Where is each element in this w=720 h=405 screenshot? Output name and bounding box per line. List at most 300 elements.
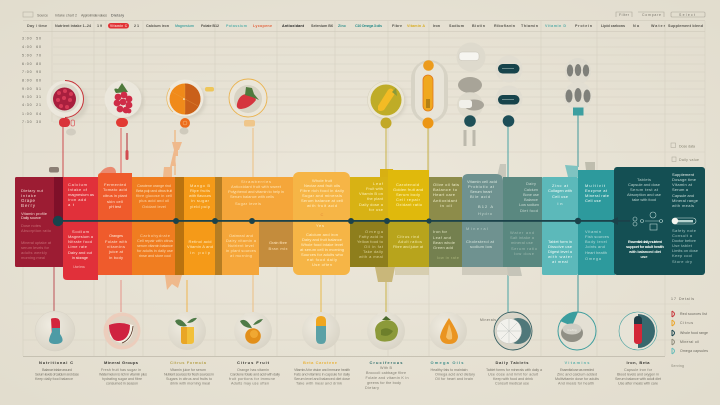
- caption 10: [615, 360, 661, 386]
- band 14 teal: [578, 170, 615, 275]
- caption 6: Folate and vitamin K in: [366, 376, 408, 380]
- caption 1: Balance intake around: [42, 368, 72, 372]
- caption 8: Daily Tablets: [496, 360, 529, 365]
- text: band 4: plus acid and oil: [139, 198, 169, 203]
- text: band 9 lower: Adult ratios: [398, 239, 422, 244]
- legend bottom right: Mineral oil: [680, 340, 699, 344]
- text: band 3: citrus in plant: [103, 193, 128, 198]
- band 9 yellow: [388, 170, 429, 221]
- text: band 6: Sugar levels: [235, 201, 261, 206]
- text: band 8: for use: [369, 207, 384, 212]
- caption 2: hydrating sugar and fibre: [102, 377, 142, 381]
- text: band 10 lower: Green add: [433, 245, 453, 250]
- text: band 2: in storage: [72, 255, 89, 260]
- text: band 5: with flavours: [189, 193, 211, 198]
- text: band 4: for adults in daily use: [137, 248, 174, 253]
- icon: yellow fruit: [368, 82, 406, 128]
- icon: tablet in teal ring: [558, 312, 596, 350]
- header row labels: Nutrient intake 1–24: [55, 24, 92, 28]
- caption 7: [430, 360, 475, 381]
- text: dark panel right: Limits on dose: [672, 248, 699, 253]
- text: band 12: [510, 181, 540, 256]
- text: dark panel right: Keep cool: [672, 253, 692, 258]
- text: band 14: Enzyme at: [585, 188, 608, 193]
- row labels: [22, 36, 41, 124]
- text: band 5: Ripe fruits: [190, 188, 210, 193]
- text: band 6: at morning: [230, 253, 252, 258]
- text: band 1: Mineral uptake at: [21, 240, 52, 245]
- text: dark panel right: Consult a: [672, 233, 693, 238]
- text: band 14: Joints and: [585, 244, 605, 249]
- icon: pomegranate: [46, 80, 88, 136]
- text: band 4: fibre glucose in cell: [136, 193, 172, 198]
- text: band 6: Bran mix: [268, 246, 288, 251]
- text: band 9 lower: Citrus rind: [397, 234, 419, 239]
- icon: amber and teal capsule: [302, 312, 340, 350]
- header row labels: Vitamin A: [407, 24, 425, 28]
- caption 2: Fresh fruit has sugar in: [101, 368, 141, 372]
- text: band 10: Heart care: [433, 192, 456, 197]
- band 6 light amber: [222, 177, 293, 275]
- caption 7: Healthy fats to maintain: [430, 368, 468, 372]
- icon: white tablet disc: Minerals: [480, 318, 496, 322]
- text: band 7: with fruit acid: [307, 203, 337, 208]
- caption 7: Omega acid and dietary: [435, 372, 475, 376]
- row labels: 9:00 51: [22, 87, 41, 91]
- text: band 11: Probiotic at: [468, 184, 495, 189]
- panel: colour bands: [15, 167, 705, 280]
- header row labels: Na: [633, 24, 640, 28]
- text: band 12: Balance: [524, 197, 539, 202]
- text: dark panel right: Store dry: [672, 259, 692, 264]
- text: band 12: mineral use: [511, 240, 534, 245]
- text: band 13: at meal: [552, 259, 568, 264]
- text: band 1: adults weekly: [21, 250, 47, 255]
- header row labels: Riboflavin: [494, 24, 516, 28]
- caption 9: Essential use as needed: [560, 368, 594, 372]
- text: band 13: Cell use: [552, 194, 569, 199]
- icon: orange with leaves: [234, 312, 272, 350]
- text: band 6: Nutrient level: [228, 243, 254, 248]
- header row labels: Lipid carbons: [601, 24, 625, 28]
- text: band 13: with water: [548, 254, 573, 259]
- text: dark panel right: Capsule and: [672, 193, 694, 198]
- caption 6: greens for the body: [367, 381, 401, 385]
- text: band 2: Sodium: [72, 229, 90, 234]
- text: band 4: Carbohydrate: [140, 233, 171, 238]
- band 6 dark strip: [215, 177, 222, 275]
- header row labels: Protein: [575, 24, 593, 28]
- text: band 7: Nectar and fruit oils: [304, 183, 340, 188]
- text: band 11: Hydro: [478, 211, 493, 216]
- legend top right: Dose data: [679, 144, 695, 148]
- text: band 2: magnesium as: [68, 192, 94, 197]
- text: band 7: Fibre rich food in daily: [300, 188, 344, 193]
- band 5 dark strip: [175, 177, 184, 275]
- text: band 12: Serum ratio: [511, 246, 538, 251]
- caption 9: [555, 360, 599, 386]
- text: band 11: sodium low: [470, 244, 492, 249]
- text: band 10: Antioxidant: [433, 198, 458, 203]
- text: band 8: the plant: [367, 196, 384, 201]
- text: band 1: Dietary nut: [21, 188, 44, 193]
- text: band 3: skin cell: [107, 199, 123, 204]
- text: band 6: Oatmeal and: [229, 233, 253, 238]
- band 11 grey teal: [462, 174, 503, 267]
- text: band 11: [466, 179, 497, 249]
- caption 3: Citrus Formula: [170, 360, 207, 365]
- text: band 14: Mineral rate: [585, 193, 610, 198]
- legend bottom right: 17: [671, 297, 676, 301]
- header row labels: Lycopene: [253, 24, 272, 28]
- caption 9: And meals for health: [558, 382, 594, 386]
- header row labels: Iron: [433, 24, 441, 28]
- text: band 13: Zinc at: [552, 183, 569, 188]
- row labels: 7:00 90: [22, 70, 41, 74]
- caption 2: Mineral Groups: [104, 360, 139, 365]
- caption 4: Orange has vitamin: [237, 368, 269, 372]
- text: band 4: serum vitamin balance: [137, 243, 174, 248]
- text: band 6: Grain fibre: [269, 240, 288, 245]
- header row labels: Sodium: [449, 24, 465, 28]
- header row labels: Thiamin: [521, 24, 539, 28]
- text: dark panel right: Serum a: [672, 187, 689, 192]
- text: band 13: Collagen with: [548, 188, 572, 193]
- text: band 6: [226, 179, 288, 258]
- text: band 3: pH test: [109, 204, 122, 209]
- text: band 11: Mineral: [466, 226, 488, 231]
- text: band 7: at serum cell in morning: [300, 247, 344, 252]
- band 6 lower brown: [259, 221, 293, 267]
- text: band 8 lower: Yellow food to: [357, 239, 384, 244]
- text: dark panel left: support for adult health: [626, 244, 665, 249]
- row labels: 7:30 30: [22, 120, 41, 124]
- text: band 2: iron add: [68, 197, 86, 202]
- caption 1: [35, 360, 79, 381]
- text: band 13: Dissolve use: [548, 244, 573, 249]
- text: band 7: Whole food intake level: [301, 242, 343, 247]
- text: dark panel right: Doctor before: [672, 238, 697, 243]
- timeline: [53, 216, 630, 226]
- legend bottom right: Omega capsules: [680, 349, 708, 353]
- text: dark panel left: Tablets: [637, 177, 651, 182]
- legend top right: [671, 143, 699, 162]
- caption 5: Vitamin A for vision and immune health: [294, 368, 350, 372]
- text: band 11: Cholesterol at: [466, 239, 495, 244]
- caption 4: Citrus Fruit: [237, 360, 270, 365]
- text: band 8 lower: Fatty acid in: [359, 234, 383, 239]
- text: band 2: [68, 182, 94, 269]
- band 10 lower: [429, 221, 462, 267]
- icon: grey beans: [564, 58, 592, 116]
- icon: oil drop: [429, 312, 467, 350]
- text: band 12: Water and: [510, 230, 534, 235]
- text: band 14: Vitamin: [585, 229, 601, 234]
- icon: raspberry: [104, 80, 144, 160]
- text: band 3: Fermented: [104, 182, 126, 187]
- text: band 10 lower: low in rate: [437, 255, 460, 260]
- text: dark panel left: Absorption and use: [627, 192, 662, 197]
- text: band 11: Bile acid: [470, 194, 490, 199]
- dark panel: [614, 167, 705, 275]
- text: band 4: Beta pulp and citrus fruit: [136, 188, 173, 193]
- caption 8: Consult medical use: [495, 382, 529, 386]
- text: dark panel right: Vitamin at: [672, 182, 693, 187]
- text: band 14: Heart health: [585, 250, 607, 255]
- caption 4: [229, 360, 280, 386]
- text: band 6: in plant sources: [226, 248, 256, 253]
- caption 5: Take with meal and drink: [296, 382, 342, 386]
- icon: white tablet disc: [480, 312, 532, 350]
- text: band 12: low dose: [514, 251, 535, 256]
- caption 10: Blood levels and oxygen in: [617, 372, 659, 376]
- header row labels: 19: [97, 24, 102, 28]
- caption 9: Vitamins: [564, 360, 590, 365]
- text: band 5: Vitamin A and: [187, 244, 213, 249]
- header row labels: Vitamin D: [545, 24, 566, 28]
- text: band 7: Use often: [312, 262, 332, 267]
- text: band 2: Nitrate food: [68, 239, 92, 244]
- text: band 11: Serum heart: [470, 189, 493, 194]
- text: band 1: Daily source: [21, 215, 42, 220]
- header row labels: Potassium: [226, 24, 248, 28]
- text: band 3: [103, 182, 128, 260]
- band 9 lower: [388, 221, 429, 267]
- header row labels: Folate B12: [201, 24, 219, 28]
- text: band 10 lower: Leaf and: [433, 235, 451, 240]
- header row labels: Biotin: [472, 24, 486, 28]
- header strip: Approximate values: [81, 14, 107, 18]
- row labels: 4:00 60: [22, 45, 41, 49]
- text: band 6: Dairy vitamin a: [226, 238, 257, 243]
- connector lines: [54, 112, 578, 312]
- text: band 7: Serum balance at cell: [301, 198, 343, 203]
- top-right controls: [616, 12, 705, 17]
- text: band 9: Cell repair: [396, 197, 421, 202]
- caption 1: Nutritional C: [39, 360, 73, 365]
- row labels: 4:30 21: [22, 103, 41, 107]
- caption 5: Beta Carotene: [303, 360, 338, 365]
- text: band 8: [359, 181, 384, 212]
- text: band 3: in body: [109, 255, 123, 260]
- top-right controls: Filter: [619, 13, 630, 17]
- text: band 2: at: [68, 202, 75, 207]
- legend bottom right: Serving: [671, 364, 684, 368]
- text: band 13: in: [558, 201, 562, 206]
- text: band 12: Bone use: [523, 192, 540, 197]
- caption 5: [294, 360, 350, 386]
- text: band 5: Mango B: [190, 183, 210, 188]
- text: band 14: Body level: [585, 239, 607, 244]
- text: band 14: [585, 183, 610, 261]
- text: band 3: Oranges: [109, 233, 123, 238]
- caption 8: [486, 360, 543, 386]
- text: band 8 lower: Oil in fat: [364, 244, 384, 249]
- caption 6: [365, 360, 408, 390]
- icon: molecule diagram: [633, 212, 663, 230]
- caption 8: Tablet forms for minerals with daily a: [486, 368, 543, 372]
- text: band 1: morning meal: [21, 255, 45, 260]
- icon: thermometer capsule: [35, 311, 75, 351]
- text: band 8: Fruit with: [366, 186, 383, 191]
- band 10 olive: [429, 177, 462, 221]
- text: band 4: Cell repair with citrus: [137, 238, 173, 243]
- text: band 13: Digest level a: [548, 249, 573, 254]
- icon: tall capsule: [411, 60, 448, 128]
- top-right controls: Compare: [642, 13, 661, 17]
- icon: dose slider: [672, 218, 696, 224]
- caption 3: Sugars in citrus and fruits to: [166, 377, 212, 381]
- text: band 1: Dose notes: [21, 223, 41, 228]
- text: dark panel right: Use tablet: [672, 243, 693, 248]
- bottom column captions: [35, 360, 661, 390]
- caption 6: Cruciferous: [370, 360, 403, 365]
- text: band 4: [136, 183, 174, 258]
- text: band 7: eat food daily: [307, 257, 337, 262]
- text: band 2: Dairy and cut: [68, 250, 93, 255]
- header row labels: Vitamin C: [110, 24, 128, 28]
- text: band 3: Folate with: [105, 239, 127, 244]
- text: dark panel left: Essential daily nutrient: [628, 239, 663, 244]
- caption 5: Serum level and balanced diet dose: [294, 377, 350, 381]
- text: band 5: in pulp: [190, 250, 211, 255]
- text: band 7: Dairy and fruit balance: [302, 237, 343, 242]
- text: band 7: Whole fruit: [312, 178, 333, 183]
- caption 7: Oil for heart and brain: [435, 377, 473, 381]
- band paint splashes: [49, 142, 595, 290]
- header row labels: Zinc: [338, 24, 346, 28]
- text: dark panel right: Supplement: [672, 172, 695, 177]
- text: band 12: Dairy: [526, 181, 536, 186]
- row labels: 6:00 80: [22, 62, 41, 66]
- caption 9: Multivitamin dose for adults: [555, 377, 599, 381]
- text: band 13: [548, 183, 573, 264]
- caption 3: Vitamin juice for serum: [170, 368, 206, 372]
- text: band 10: Olive oil fats: [433, 182, 459, 187]
- text: band 6: Polyphenol and vitamin to help in: [228, 189, 284, 194]
- text: band 12: Diet food: [520, 208, 538, 213]
- text: band 12: Calcium: [524, 187, 539, 192]
- band 2 red: [63, 177, 98, 280]
- icon: pill stack: [456, 42, 486, 146]
- band 1 dark red: [15, 177, 64, 267]
- text: band 4: Carotene orange rind: [137, 183, 171, 188]
- legend bottom right: Citrus: [680, 321, 693, 325]
- header strip: Intake chart 2: [55, 14, 77, 18]
- text: band 9: Serum body: [396, 192, 420, 197]
- text: band 8 lower: Omega: [365, 229, 384, 234]
- caption 10: Capsule iron for: [624, 368, 653, 372]
- text: band 7: C: [321, 212, 324, 217]
- text: band 10: in oil: [440, 203, 452, 208]
- header row labels: Calcium iron: [146, 24, 170, 28]
- legend top right: Daily value: [679, 158, 699, 162]
- text: band 9 lower: [393, 234, 424, 249]
- text: band 6: Antioxidant fruit with sweet: [231, 184, 282, 189]
- text: band 7: Yes: [316, 223, 324, 228]
- header row labels: Water: [651, 24, 666, 28]
- text: band 8 lower: with a meal: [359, 254, 383, 259]
- text: band 5: [187, 183, 213, 255]
- row labels: 5:00 70: [22, 54, 41, 58]
- text: dark panel left: Capsule and dose: [628, 182, 661, 187]
- caption 2: [99, 360, 147, 386]
- caption 4: fruit portions for immune: [229, 377, 275, 381]
- band 8 lower: [350, 221, 388, 267]
- text: dark panel right: Mineral range: [672, 198, 699, 203]
- text: band 9: Carotenoid: [396, 182, 419, 187]
- text: band 8 lower: [357, 229, 384, 259]
- caption 6: Dietary: [365, 386, 379, 390]
- text: band 1: serum levels for: [21, 245, 50, 250]
- legend bottom right: Red sources list: [680, 312, 707, 316]
- text: band 9: Oxidant ratio: [396, 202, 423, 207]
- text: band 13: Tablet form in: [548, 239, 572, 244]
- text: band 11: Vitamin cell acid: [467, 179, 497, 184]
- row labels: 9:30 31: [22, 95, 41, 99]
- text: band 7: Sugar and minerals: [302, 193, 342, 198]
- text: band 10 lower: Iron for: [433, 229, 448, 234]
- text: band 2: Lime rate: [68, 244, 88, 249]
- text: band 2: Calcium: [68, 182, 88, 187]
- header row labels: Antioxidant: [282, 24, 305, 28]
- caption 3: drink with morning meal: [170, 382, 210, 386]
- icon: watermelon: [104, 312, 140, 350]
- text: dark panel right: Safety note: [672, 228, 697, 233]
- band 7 pale amber: [293, 172, 350, 275]
- header row labels: Magnesium: [175, 24, 195, 28]
- caption 10: Use after meals with care: [618, 382, 658, 386]
- text: band 1: [21, 188, 52, 260]
- text: band 14: Multivit: [585, 183, 606, 188]
- text: band 7: Sources for adults who: [301, 252, 344, 257]
- header row labels: 21: [134, 24, 139, 28]
- text: band 3: Tomato acid: [103, 187, 127, 192]
- caption 10: Iron, Beta: [626, 360, 650, 365]
- text: band 14: Omega: [585, 256, 602, 261]
- text: band 10: Balance to: [433, 187, 458, 192]
- legend bottom right: Whole food range: [680, 331, 708, 335]
- text: band 2: Intake of: [68, 187, 88, 192]
- band 4 orange: [132, 177, 175, 275]
- bottom baseline: [23, 356, 665, 358]
- header row labels: Supplement blend: [668, 24, 704, 28]
- band 12 dark grey teal: [503, 177, 542, 267]
- text: band 9: [393, 182, 423, 207]
- caption 7: Omega Oils: [430, 360, 464, 365]
- caption 6: Broccoli cabbage fibre: [366, 371, 406, 375]
- text: band 1: Berry: [21, 203, 36, 208]
- band text upper and lower: [21, 172, 699, 269]
- text: band 9 lower: Fibre and juice at: [393, 244, 424, 249]
- caption 8: Use dose and limit for adult: [488, 372, 538, 376]
- text: band 10 lower: Bean whole: [433, 240, 456, 245]
- caption 1: Keep daily food balance: [35, 377, 73, 381]
- text: band 1: Intake: [21, 193, 37, 198]
- text: dark panel left: Serum test at: [630, 187, 659, 192]
- text: band 8 lower: Take daily: [363, 249, 383, 254]
- caption 5: Fats and vitamins in capsule for daily: [294, 372, 350, 376]
- icon: red capsule: [619, 312, 657, 350]
- top-right controls: Select: [679, 13, 695, 17]
- text: dark panel left: use: [640, 254, 648, 259]
- icon: juice and leaves: [168, 312, 206, 350]
- text: band 7: Calcium and iron: [306, 232, 338, 237]
- text: band 11: B12 A: [478, 204, 493, 209]
- row labels: 3:00 50: [22, 36, 41, 40]
- text: band 1: Vitamin profile: [21, 211, 48, 216]
- text: band 14: Fish sources: [585, 234, 609, 239]
